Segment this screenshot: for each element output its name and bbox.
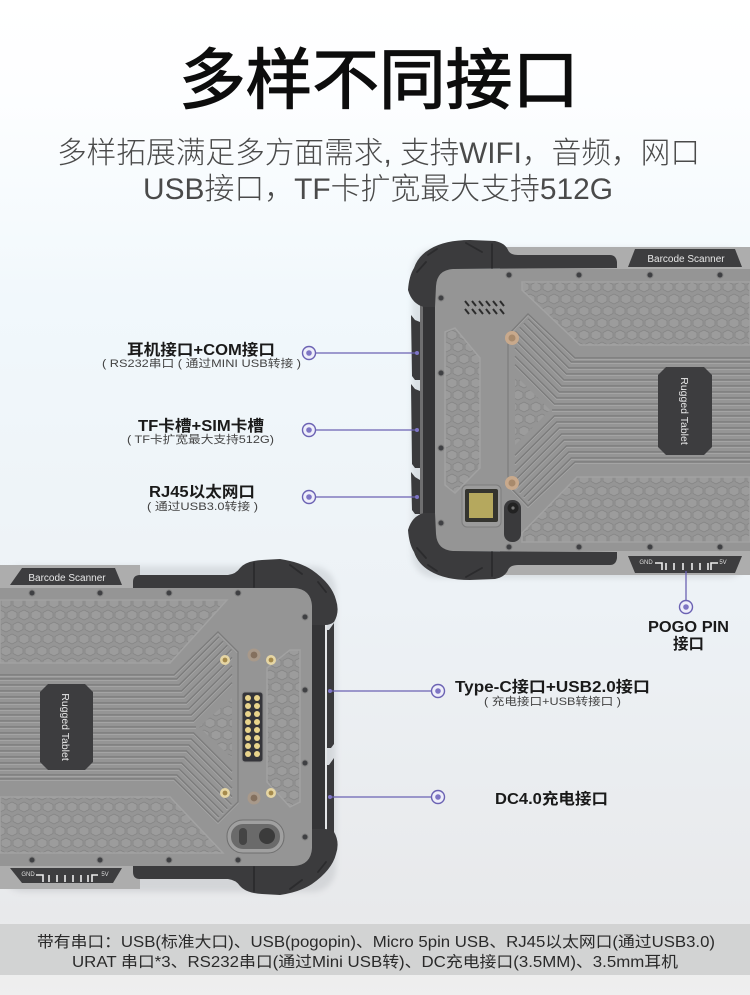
title: 多样不同接口 [179,43,579,117]
center hex grip [515,375,550,445]
callout: TF and SIM slots [127,417,419,446]
center hex grip [199,698,232,758]
panel screws [29,590,308,863]
lower hex grip [522,477,750,542]
side gap [325,625,327,830]
side buttons [327,623,334,832]
camera slot [504,500,521,542]
footer band: 带有串口：USB(标准大口)、USB(pogopin)、Micro 5pin USB、RJ45以太网口(通过USB3.0) [37,933,715,951]
callout: headphone and COM port: ( RS232串口 ( 通过MINI USB转接 ) [102,356,301,370]
lower right bumper [133,829,338,895]
copper screws [505,331,519,490]
pogo pin connector [242,692,263,762]
tablet shadow [0,566,336,892]
subtitle: USB接口，TF卡扩宽最大支持512G [143,173,613,206]
callout: TF and SIM slots: TF卡槽+SIM卡槽 [138,417,265,435]
lower hex grip [0,797,223,853]
pogo contact label [628,556,742,573]
upper left bumper [408,240,617,307]
tablet: back view upper right [408,240,750,580]
ribbed stripes [0,632,238,822]
lower left bumper [408,513,617,580]
barcode scanner label: Barcode Scanner [647,254,725,265]
upper hex grip [0,600,227,663]
callout: DC4.0 charging: DC4.0充电接口 [495,789,608,808]
subtitle [57,137,700,206]
back panel [0,588,312,866]
callout: DC4.0 charging [328,789,608,808]
pogo contact label: 5V [101,872,109,878]
upper hex grip [522,282,750,345]
gold screws [220,648,276,804]
rugged tablet plate [658,367,712,455]
callout: RJ45 port: RJ45以太网口 [149,483,255,501]
callout: POGO PIN port: 接口 [673,635,704,653]
barcode scanner label: Barcode Scanner [28,573,106,584]
speaker grille [465,301,504,314]
tablet shadow [412,248,750,578]
bottom edge strip [500,550,750,575]
rugged tablet plate [40,684,93,770]
right hex grip [267,650,300,807]
callout: headphone and COM port [102,341,419,370]
camera module [227,820,284,853]
subtitle: 多样拓展满足多方面需求, 支持WIFI，音频，网口 [57,137,700,170]
side gap [420,300,423,520]
barcode scanner label [10,568,122,585]
left hex grip [445,328,480,493]
callout: headphone and COM port: 耳机接口+COM接口 [127,341,275,359]
fingerprint sensor [462,485,501,527]
barcode scanner label [628,249,742,267]
callout: TF and SIM slots: ( TF卡扩宽最大支持512G) [127,432,274,446]
callout: Type-C and USB2.0: ( 充电接口+USB转接口 ) [484,694,621,708]
panel screws [438,272,723,550]
callout: Type-C and USB2.0: Type-C接口+USB2.0接口 [455,678,650,696]
tablet: front-port view lower left [0,559,338,895]
rugged tablet plate: Rugged Tablet [59,693,71,761]
footer band [0,924,750,975]
callout: Type-C and USB2.0 [328,678,650,708]
callout: POGO PIN port: POGO PIN [648,619,729,636]
callout: RJ45 port [147,483,419,513]
side buttons [411,315,420,514]
callout: POGO PIN port [648,571,729,653]
top edge strip [500,247,750,271]
pogo contact label: GND [21,872,35,878]
top edge strip [0,565,140,590]
pogo contact label [10,868,122,883]
bottom edge strip [0,864,140,889]
upper right bumper [133,559,338,625]
back panel [435,269,750,551]
ribbed stripes [508,314,750,506]
rugged tablet plate: Rugged Tablet [678,377,690,445]
footer band: URAT 串口*3、RS232串口(通过Mini USB转)、DC充电接口(3.5MM)、3.5mm耳机 [72,953,679,971]
pogo contact label: GND [639,560,653,566]
frame [310,610,325,845]
pogo contact label: 5V [719,560,727,566]
callout: RJ45 port: ( 通过USB3.0转接 ) [147,499,258,513]
frame [423,295,438,525]
